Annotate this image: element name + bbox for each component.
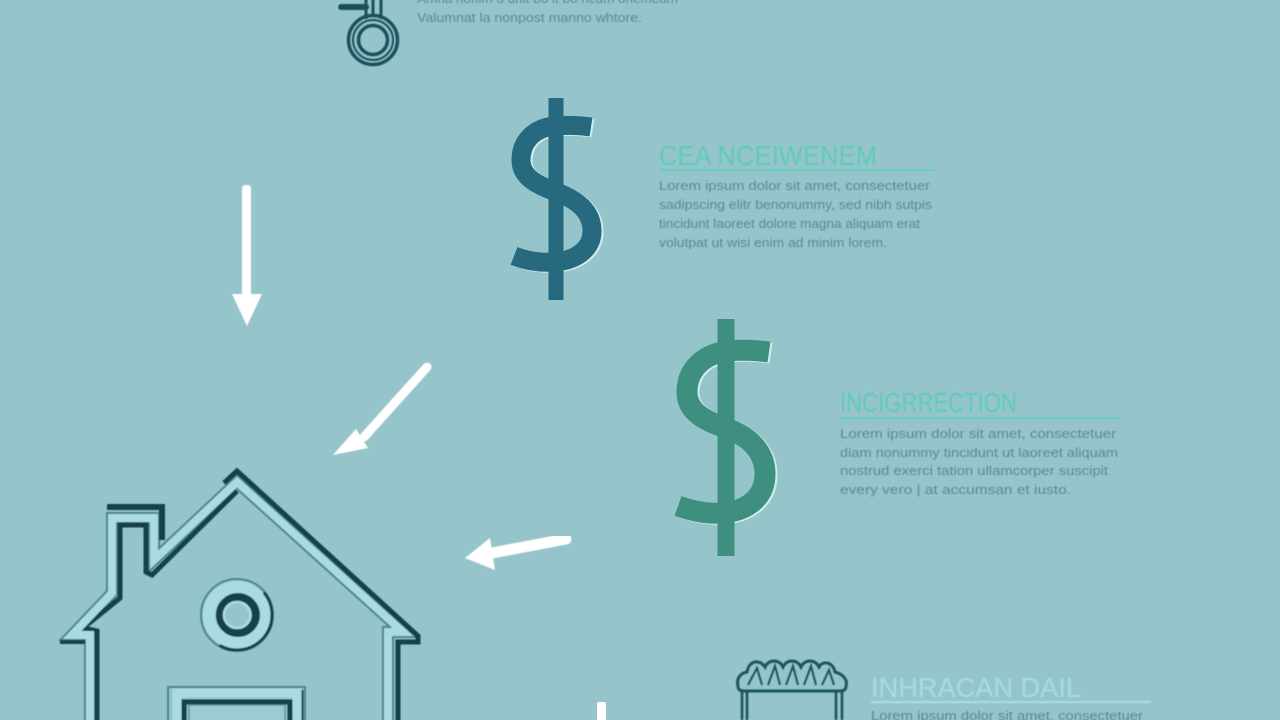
- icon: house: [60, 471, 418, 720]
- text block: ledger step: [871, 672, 1151, 720]
- text block: green dollar step: nostrud exerci tation ullamcorper suscipit: [840, 464, 1109, 478]
- arrow: bottom vertical: [597, 702, 606, 720]
- text block: blue dollar step: [659, 140, 935, 250]
- house round window: [201, 579, 273, 651]
- icon: blue dollar sign: [514, 98, 594, 300]
- arrow: left: [465, 538, 566, 570]
- arrow: diagonal down-left: [333, 367, 427, 455]
- text block: green dollar step: [840, 387, 1120, 497]
- house outline: [60, 471, 418, 720]
- text block: blue dollar step: tincidunt laoreet dolore magna aliquam erat: [659, 217, 921, 231]
- text block: blue dollar step: Lorem ipsum dolor sit amet, consectetuer: [659, 179, 930, 193]
- heading: first step: CEA NCEIWENEM: [659, 140, 877, 171]
- icon: green dollar sign: [678, 319, 771, 556]
- text block: key step: Valumnat la nonpost manno whtore.: [417, 11, 642, 25]
- icon: key: [341, 0, 398, 64]
- icon: ledger with crown: [738, 661, 846, 720]
- text block: key step: [417, 0, 678, 25]
- house door: [168, 687, 305, 720]
- heading: second step: INCIGRRECTION: [840, 387, 1017, 418]
- text block: blue dollar step: sadipscing elitr benonummy, sed nibh sutpis: [659, 198, 932, 212]
- text block: green dollar step: Lorem ipsum dolor sit amet, consectetuer: [840, 427, 1116, 441]
- arrow: vertical down: [232, 185, 262, 326]
- text block: green dollar step: diam nonummy tincidunt ut laoreet aliquam: [840, 446, 1118, 460]
- text block: blue dollar step: volutpat ut wisi enim ad minim lorem.: [659, 236, 887, 250]
- text block: green dollar step: every vero | at accumsan et iusto.: [840, 483, 1071, 497]
- heading: third step: INHRACAN DAIL: [871, 672, 1081, 703]
